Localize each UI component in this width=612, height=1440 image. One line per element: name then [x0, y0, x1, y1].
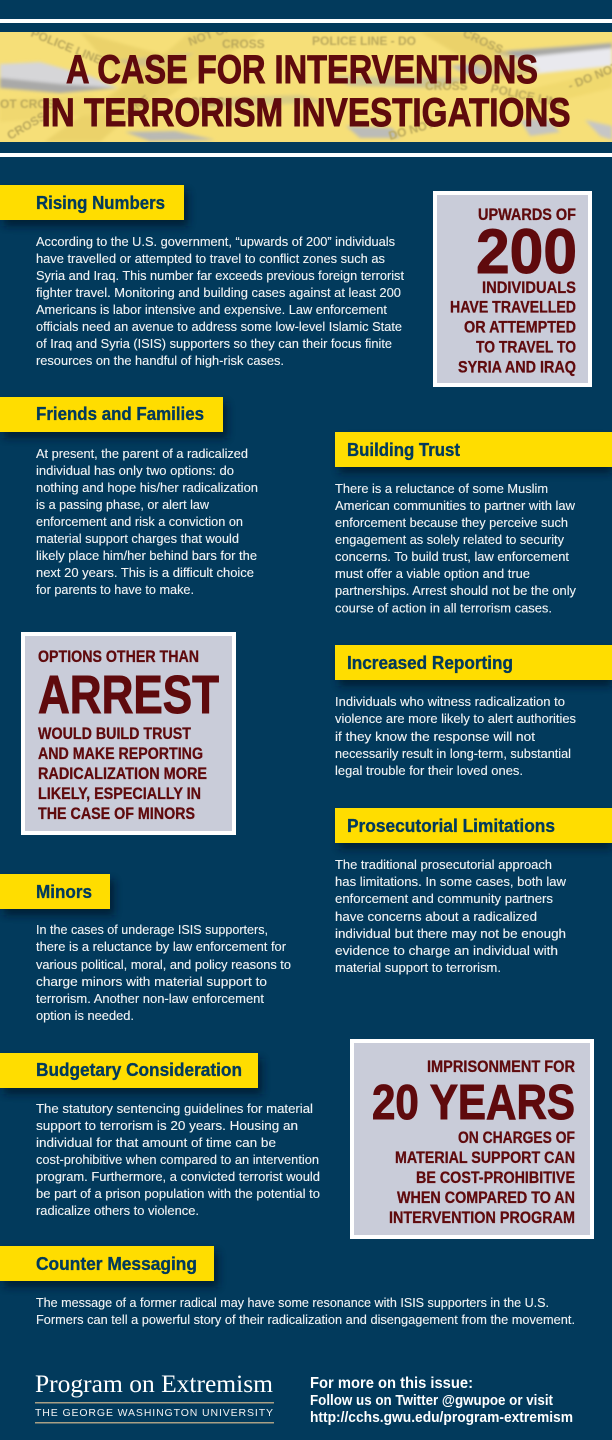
- header banner: police tape: CROSS: [4, 109, 48, 143]
- callout: options other than arrest: OPTIONS OTHER THAN: [38, 648, 199, 666]
- text: friends and families: nothing and hope his/her radicalization: [36, 481, 258, 495]
- text: increased reporting: legal trouble for their loved ones.: [335, 764, 523, 778]
- text: friends and families: At present, the parent of a radicalized: [36, 447, 248, 461]
- callout: imprisonment for 20 years: WHEN COMPARED TO AN: [397, 1189, 575, 1207]
- panel: rising numbers heading: [0, 185, 188, 226]
- panel: minors heading: [0, 874, 114, 915]
- callout: options other than arrest: WOULD BUILD TRUST: [38, 725, 191, 743]
- text: budgetary consideration: cost-prohibitive when compared to an intervention: [36, 1153, 319, 1167]
- callout: imprisonment for 20 years: MATERIAL SUPPORT CAN: [395, 1149, 575, 1167]
- callout: upwards of 200: [433, 191, 592, 387]
- text: rising numbers: Syria and Iraq. This number far exceeds previous foreign terrorist: [36, 269, 404, 283]
- callout: imprisonment for 20 years: BE COST-PROHIBITIVE: [416, 1169, 575, 1187]
- text: budgetary consideration: support to terrorism is 20 years. Housing an: [36, 1119, 298, 1133]
- text: minors: various political, moral, and policy reasons to: [36, 958, 291, 972]
- panel: prosecutorial limitations heading: [335, 808, 612, 849]
- header banner: police tape: POLICE LINE: [29, 26, 104, 67]
- callout: options other than arrest: AND MAKE REPORTING: [38, 745, 203, 763]
- text: minors: [36, 923, 291, 1023]
- text: rising numbers: resources on the handful of high-risk cases.: [36, 354, 284, 368]
- callout: upwards of 200: SYRIA AND IRAQ: [458, 358, 576, 376]
- text: friends and families: [36, 447, 258, 597]
- footer contact text: For more on this issue:: [310, 1375, 473, 1392]
- panel: increased reporting heading: [335, 645, 612, 686]
- panel: budgetary consideration heading: [0, 1053, 262, 1094]
- panel: minors heading: Minors: [36, 881, 92, 902]
- panel: building trust heading: [335, 432, 612, 473]
- callout: imprisonment for 20 years: IMPRISONMENT FOR: [427, 1058, 575, 1076]
- text: prosecutorial limitations: material support to terrorism.: [335, 961, 501, 975]
- header banner: police tape: POLICE LINE: [489, 81, 566, 111]
- text: building trust: course of action in all terrorism cases.: [335, 602, 552, 616]
- logo: program on extremism: Program on Extremism: [35, 1371, 274, 1398]
- text: budgetary consideration: radicalize others to violence.: [36, 1204, 199, 1218]
- text: budgetary consideration: [36, 1102, 320, 1218]
- panel: counter messaging heading: [0, 1246, 218, 1287]
- text: increased reporting: Individuals who witness radicalization to: [335, 695, 565, 709]
- header banner: police tape: NOT CR: [186, 20, 235, 49]
- text: rising numbers: officials need an avenue to address some low-level Islamic State: [36, 320, 402, 334]
- text: friends and families: material support charges that would: [36, 532, 239, 546]
- panel: increased reporting heading: Increased Reporting: [347, 652, 513, 673]
- callout: options other than arrest: THE CASE OF MINORS: [38, 805, 195, 823]
- logo: program on extremism: THE GEORGE WASHINGTON UNIVERSITY: [35, 1407, 273, 1419]
- text: friends and families: next 20 years. This is a difficult choice: [36, 566, 254, 580]
- text: minors: charge minors with material support to: [36, 975, 267, 989]
- header banner: police tape: CROSS: [222, 37, 265, 51]
- callout: upwards of 200: UPWARDS OF: [478, 206, 576, 224]
- text: increased reporting: if they know the response will not: [335, 730, 536, 744]
- text: increased reporting: violence are more likely to alert authorities: [335, 712, 576, 726]
- text: friends and families: likely place him/her behind bars for the: [36, 549, 257, 563]
- text: building trust: partnerships. Arrest should not be the only: [335, 584, 577, 598]
- footer contact text: http://cchs.gwu.edu/program-extremism: [310, 1410, 573, 1426]
- text: minors: option is needed.: [36, 1009, 134, 1023]
- text: rising numbers: fighter travel. Monitoring and building cases against at least 200: [36, 286, 401, 300]
- text: budgetary consideration: program. Furthermore, a convicted terrorist would: [36, 1170, 320, 1184]
- text: friends and families: for parents to have to make.: [36, 583, 194, 597]
- header banner: police tape: OT CROSS: [0, 97, 63, 111]
- text: increased reporting: [335, 695, 576, 778]
- text: increased reporting: necessarily result in long-term, substantial: [335, 747, 571, 761]
- text: rising numbers: have travelled or attempted to travel to conflict zones such as: [36, 252, 385, 266]
- header banner: police tape: POLICE LINE - DO: [312, 34, 416, 48]
- callout: upwards of 200: OR ATTEMPTED: [464, 318, 576, 336]
- header banner: police tape: CROSS: [425, 79, 468, 93]
- logo: program on extremism: [35, 1371, 274, 1424]
- text: building trust: [335, 482, 577, 616]
- text: prosecutorial limitations: evidence to charge an individual with: [335, 944, 558, 958]
- callout: upwards of 200: HAVE TRAVELLED: [450, 298, 576, 316]
- callout: options other than arrest: ARREST: [38, 665, 219, 725]
- text: building trust: engagement as solely related to security: [335, 533, 565, 547]
- text: building trust: There is a reluctance of some Muslim: [335, 482, 548, 496]
- text: minors: there is a reluctance by law enforcement for: [36, 940, 286, 954]
- text: rising numbers: Americans is labor intensive and expensive. Law enforcement: [36, 303, 387, 317]
- text: rising numbers: [36, 235, 404, 368]
- header banner: police tape: [0, 32, 612, 142]
- text: friends and families: individual has only two options: do: [36, 464, 234, 478]
- header banner: police tape: CROSS: [190, 95, 233, 109]
- footer contact text: [310, 1375, 573, 1426]
- header banner: police tape: LINE: [123, 92, 153, 120]
- text: counter messaging: Formers can tell a powerful story of their radicalization and disengagement from the movement.: [36, 1313, 575, 1327]
- callout: imprisonment for 20 years: ON CHARGES OF: [458, 1129, 575, 1147]
- callout: options other than arrest: RADICALIZATION MORE: [38, 765, 207, 783]
- text: prosecutorial limitations: The traditional prosecutorial approach: [335, 858, 552, 872]
- header banner: police tape: DO NOT: [387, 116, 436, 143]
- text: budgetary consideration: The statutory sentencing guidelines for material: [36, 1102, 313, 1116]
- text: rising numbers: According to the U.S. government, “upwards of 200” individuals: [36, 235, 395, 249]
- callout: imprisonment for 20 years: 20 YEARS: [372, 1076, 575, 1130]
- text: minors: In the cases of underage ISIS supporters,: [36, 923, 268, 937]
- top white rule: [0, 19, 612, 23]
- text: building trust: concerns. To build trust, law enforcement: [335, 550, 570, 564]
- text: rising numbers: of Iraq and Syria (ISIS) supporters so they can their focus finite: [36, 337, 392, 351]
- bottom banner white rule: [0, 153, 612, 157]
- text: friends and families: is a passing phase, or alert law: [36, 498, 210, 512]
- header banner: police tape: CROSS: [461, 26, 505, 57]
- panel: friends and families heading: [0, 397, 227, 438]
- text: building trust: must offer a viable option and true: [335, 567, 530, 581]
- text: prosecutorial limitations: have concerns about a radicalized: [335, 910, 537, 924]
- callout: options other than arrest: [21, 632, 236, 835]
- text: friends and families: enforcement and risk a conviction on: [36, 515, 243, 529]
- panel: prosecutorial limitations heading: Prosecutorial Limitations: [347, 815, 555, 836]
- text: prosecutorial limitations: individual but there may not be enough: [335, 927, 566, 941]
- callout: upwards of 200: INDIVIDUALS: [482, 279, 576, 297]
- text: budgetary consideration: be part of a prison population with the potential to: [36, 1187, 320, 1201]
- panel: rising numbers heading: Rising Numbers: [36, 192, 165, 213]
- text: counter messaging: The message of a former radical may have some resonance with ISIS supporters in the U.S.: [36, 1296, 549, 1310]
- title: [42, 48, 570, 135]
- text: prosecutorial limitations: [335, 858, 567, 975]
- text: minors: terrorism. Another non-law enforcement: [36, 992, 265, 1006]
- callout: options other than arrest: LIKELY, ESPECIALLY IN: [38, 785, 201, 803]
- text: building trust: enforcement because they perceive such: [335, 516, 568, 530]
- callout: upwards of 200: TO TRAVEL TO: [476, 338, 576, 356]
- callout: imprisonment for 20 years: [350, 1039, 594, 1239]
- panel: counter messaging heading: Counter Messaging: [36, 1253, 197, 1274]
- footer contact text: Follow us on Twitter @gwupoe or visit: [310, 1393, 553, 1409]
- text: counter messaging: [36, 1296, 575, 1327]
- panel: building trust heading: Building Trust: [347, 439, 460, 460]
- text: budgetary consideration: individual for that amount of time can be: [36, 1136, 276, 1150]
- text: building trust: American communities to partner with law: [335, 499, 576, 513]
- text: prosecutorial limitations: has limitations. In some cases, both law: [335, 875, 567, 889]
- callout: imprisonment for 20 years: INTERVENTION PROGRAM: [389, 1209, 575, 1227]
- text: prosecutorial limitations: enforcement and community partners: [335, 892, 553, 906]
- panel: friends and families heading: Friends and Families: [36, 403, 204, 424]
- callout: upwards of 200: 200: [476, 217, 577, 287]
- panel: budgetary consideration heading: Budgetary Consideration: [36, 1059, 242, 1080]
